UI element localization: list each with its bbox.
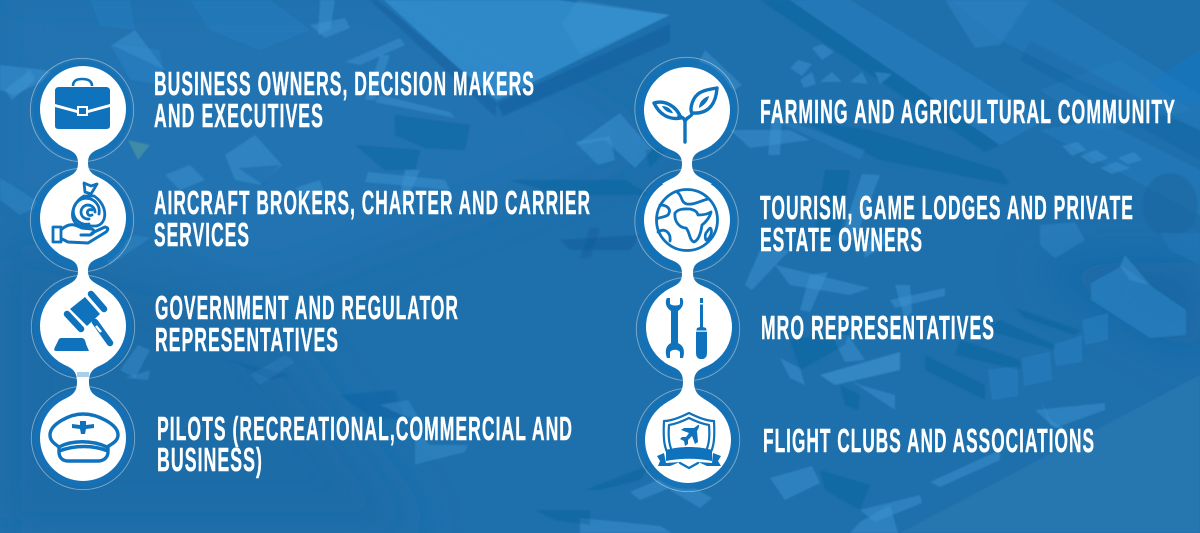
label: tourism xyxy=(760,190,1134,259)
label: pilots: BUSINESS) xyxy=(157,442,263,479)
umbrellas and terrace xyxy=(812,44,834,60)
label: MRO: MRO REPRESENTATIVES xyxy=(761,310,995,347)
hangar xyxy=(378,0,670,100)
right planes xyxy=(815,170,850,235)
label: business owners: AND EXECUTIVES xyxy=(154,98,324,135)
left side tents and planes xyxy=(110,44,165,85)
label: pilots: PILOTS (RECREATIONAL,COMMERCIAL AND xyxy=(157,411,573,448)
tents in middle xyxy=(575,113,652,168)
icon: globe xyxy=(656,190,718,250)
connector shapes: left chain xyxy=(30,58,135,490)
tree xyxy=(1142,173,1198,237)
icon: hand holding money bag xyxy=(53,183,108,243)
label: government: REPRESENTATIVES xyxy=(155,322,339,359)
connector shapes: right chain xyxy=(635,57,740,492)
long building right xyxy=(790,0,1045,145)
icon: briefcase xyxy=(55,79,110,129)
icon: pilot cap xyxy=(50,414,118,461)
label: pilots xyxy=(157,411,573,479)
label: aircraft brokers: SERVICES xyxy=(154,217,250,254)
icon: shield with plane and ribbon xyxy=(657,413,721,468)
label: business owners: BUSINESS OWNERS, DECISION MAKERS xyxy=(154,66,535,103)
label: government xyxy=(155,290,459,359)
label: aircraft brokers xyxy=(154,185,591,254)
label: aircraft brokers: AIRCRAFT BROKERS, CHARTER AND CARRIER xyxy=(154,185,591,222)
panel: left column xyxy=(30,58,591,490)
label: tourism: ESTATE OWNERS xyxy=(760,222,923,259)
panel: right column xyxy=(635,57,1176,492)
label: business owners xyxy=(154,66,535,135)
icon: gavel xyxy=(54,294,110,351)
icon: wrench and screwdriver xyxy=(666,298,707,359)
icon: sprouting plant xyxy=(654,88,717,142)
lower left planes xyxy=(120,345,150,378)
label: government: GOVERNMENT AND REGULATOR xyxy=(155,290,459,327)
